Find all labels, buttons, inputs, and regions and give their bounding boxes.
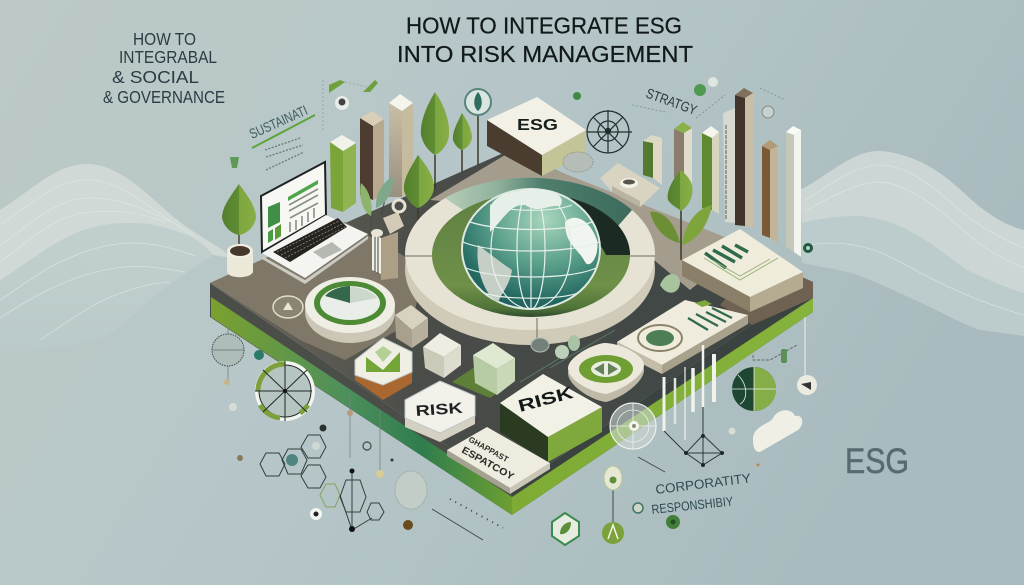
background wave left xyxy=(0,164,232,348)
globe xyxy=(462,189,600,309)
left heading text: INTEGRABAL xyxy=(119,47,217,67)
corporate responsibility label: RESPONSHIBIY xyxy=(651,493,734,517)
icon: triangle badge xyxy=(602,480,624,544)
icon: leaf oval xyxy=(604,466,622,490)
icon: dotted globe xyxy=(212,328,264,411)
RISK block xyxy=(500,374,602,462)
small chart marks xyxy=(753,345,797,363)
icon: small ring xyxy=(633,503,643,513)
laptop xyxy=(261,162,368,284)
RISK hexagon: RISK xyxy=(415,400,463,420)
plant right xyxy=(650,170,712,293)
chart card xyxy=(617,300,748,374)
left heading text xyxy=(103,29,225,107)
label: ESG right: ESG xyxy=(845,442,909,481)
sustainability note: SUSTAINATI xyxy=(247,102,310,142)
ring upper arc xyxy=(445,178,632,226)
tan left area xyxy=(210,222,425,360)
title xyxy=(397,12,693,67)
hanging bars xyxy=(664,345,714,440)
small floating dots xyxy=(237,395,503,540)
ESG block: ESG xyxy=(517,117,558,134)
background wave right xyxy=(800,151,1024,336)
platform left side xyxy=(210,283,512,515)
mound xyxy=(660,274,680,293)
laptop screen xyxy=(261,162,326,252)
small ring xyxy=(273,296,303,318)
hexagon network xyxy=(260,435,384,532)
corporate strategy card: GHAPPAST xyxy=(467,435,510,464)
RISK hexagon xyxy=(405,381,475,442)
platform right side xyxy=(512,282,813,515)
trees xyxy=(404,89,491,220)
ring base xyxy=(405,193,655,345)
icon: pendant ball xyxy=(797,317,817,395)
icon: target wheel xyxy=(587,110,632,153)
touchpad xyxy=(313,242,342,259)
light cube xyxy=(423,333,461,378)
card medallion xyxy=(638,325,682,351)
left heading text: & GOVERNANCE xyxy=(103,87,225,107)
ring hole shadow xyxy=(500,193,630,255)
platform top surface xyxy=(210,150,813,490)
ring hole xyxy=(432,193,630,317)
donut disc xyxy=(273,277,395,343)
cubes xyxy=(395,305,515,398)
bars chart right xyxy=(643,88,813,257)
icon: shield xyxy=(552,513,579,545)
green hexagon block xyxy=(355,338,412,400)
bottom icons xyxy=(552,466,680,545)
small machine icon xyxy=(563,152,660,207)
globe land masses xyxy=(477,245,512,303)
icon: cloud xyxy=(753,410,802,452)
corporate strategy card xyxy=(447,427,550,494)
RISK block: RISK xyxy=(516,383,576,416)
sustainability note xyxy=(230,80,378,170)
icon: split sphere xyxy=(732,367,776,411)
corporate strategy card: ESPATCOY xyxy=(460,445,516,483)
label: strategy xyxy=(573,77,785,118)
bars chart left xyxy=(330,94,413,212)
right hanging bits xyxy=(728,317,817,466)
chart block xyxy=(682,229,803,312)
potted plant xyxy=(222,184,256,277)
left heading text: & SOCIAL xyxy=(112,67,199,87)
icon: spoked wheel xyxy=(255,361,315,421)
globe grid xyxy=(463,189,599,309)
platform xyxy=(210,150,813,515)
corporate responsibility label xyxy=(638,457,752,517)
brown edge block right xyxy=(720,258,813,325)
corporate responsibility label: CORPORATITY xyxy=(655,470,752,497)
icon: green dot xyxy=(666,515,680,529)
round green button xyxy=(568,343,644,402)
sapling and striped posts xyxy=(360,177,405,280)
central ring xyxy=(405,178,655,345)
small mounds xyxy=(520,330,615,382)
ESG block xyxy=(487,97,586,176)
keyboard xyxy=(273,218,347,262)
left heading text: HOW TO xyxy=(133,29,196,49)
icon: target disc xyxy=(610,403,656,449)
tan cube xyxy=(395,305,428,348)
tan back area xyxy=(430,152,745,290)
laptop base xyxy=(262,215,368,278)
title: INTO RISK MANAGEMENT xyxy=(397,41,693,67)
diamond network icon xyxy=(664,407,724,467)
pale green cube xyxy=(452,343,515,398)
label: strategy: STRATGY xyxy=(644,85,700,118)
icon: badge xyxy=(465,89,491,115)
title: HOW TO INTEGRATE ESG xyxy=(406,12,682,38)
